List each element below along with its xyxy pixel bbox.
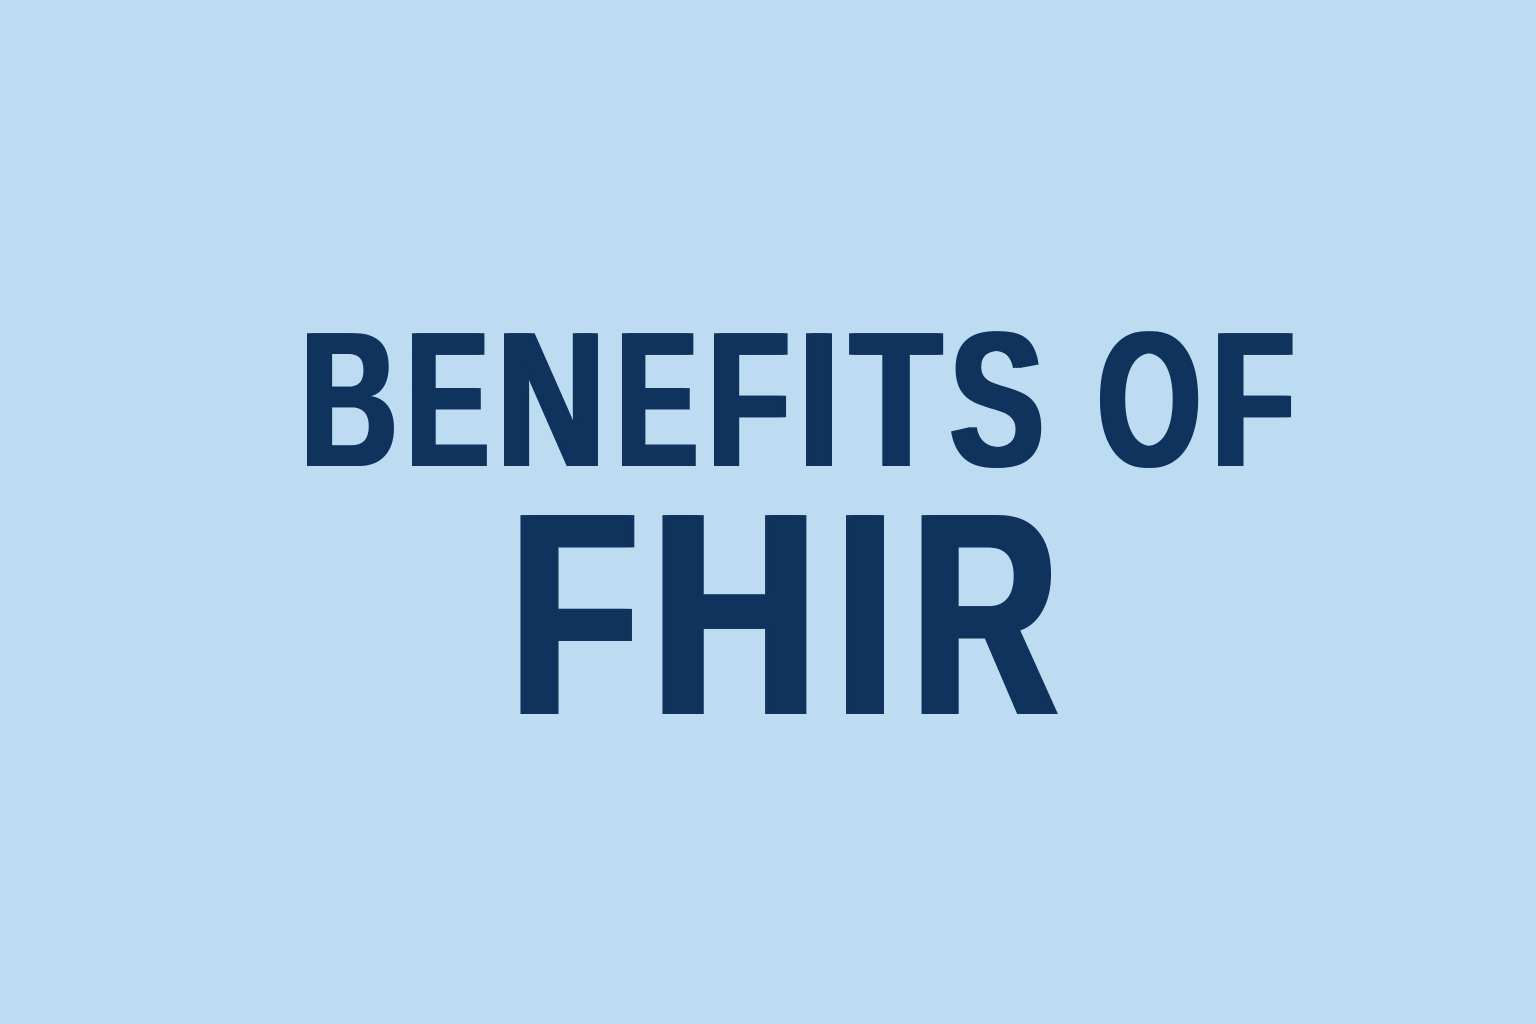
title line: BENEFITS OF: I (800, 291, 838, 507)
title line: BENEFITS OF: F (708, 291, 789, 507)
title line: FHIR: R (912, 453, 1058, 776)
title line: BENEFITS OF: N (497, 291, 605, 507)
title line: BENEFITS OF: F (1212, 291, 1295, 507)
title line: BENEFITS OF: O (1098, 291, 1201, 507)
title line: BENEFITS OF (301, 291, 1295, 507)
title line: BENEFITS OF: S (950, 291, 1044, 507)
title line: BENEFITS OF: E (617, 291, 697, 507)
title (301, 291, 1295, 776)
title line: BENEFITS OF: T (850, 291, 942, 507)
title line: FHIR (510, 453, 1058, 776)
title line: FHIR: H (651, 453, 818, 776)
title line: BENEFITS OF: E (407, 291, 489, 507)
title line: FHIR: F (510, 453, 638, 776)
title line: BENEFITS OF: B (301, 291, 397, 507)
title line: FHIR: I (836, 453, 894, 776)
